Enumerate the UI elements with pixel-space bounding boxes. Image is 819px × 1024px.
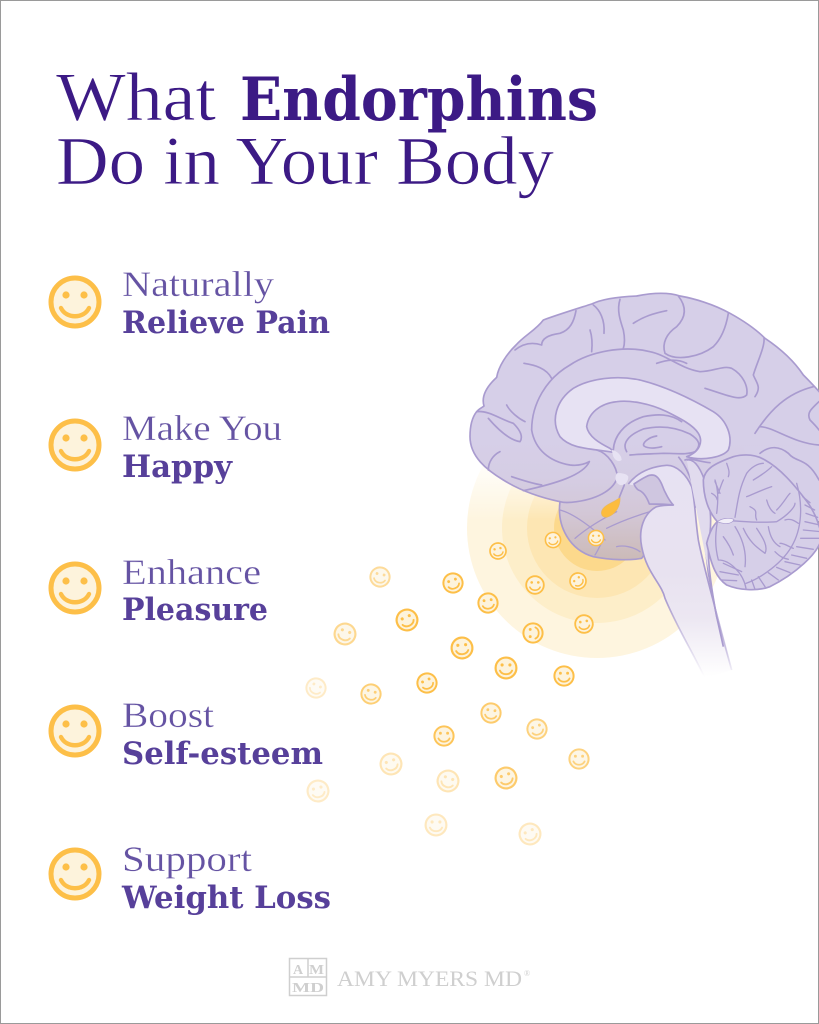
benefit: Boost Self-esteem: Self-esteem — [122, 736, 323, 772]
benefit: Naturally Relieve Pain: Relieve Pain — [122, 305, 330, 341]
title: Endorphins — [240, 65, 598, 135]
benefit: Support Weight Loss: Support — [122, 839, 252, 879]
benefit: Naturally Relieve Pain — [51, 264, 330, 341]
benefit: Make You Happy — [51, 408, 282, 485]
benefit: Support Weight Loss — [51, 839, 331, 916]
benefit: Enhance Pleasure — [51, 552, 268, 628]
title: What — [56, 59, 216, 135]
optic chiasm gap — [612, 450, 628, 485]
brain illustration — [460, 293, 819, 678]
logo mark: M — [309, 963, 324, 978]
benefit: Boost Self-esteem: Boost — [122, 695, 214, 735]
logo mark: MD — [292, 981, 324, 996]
logo mark: A — [293, 963, 304, 978]
yellow radiating rings — [460, 395, 740, 658]
cerebrum — [470, 293, 819, 560]
benefit: Support Weight Loss: Weight Loss — [121, 880, 331, 916]
benefit: Enhance Pleasure: Enhance — [122, 552, 261, 592]
title — [56, 59, 598, 199]
cerebellum — [703, 455, 819, 590]
pituitary — [601, 497, 620, 517]
right lobe base colour — [743, 447, 819, 523]
corpus callosum — [555, 378, 730, 459]
cerebellar junction highlight — [717, 518, 734, 524]
benefit: Make You Happy: Happy — [122, 449, 233, 485]
benefit: Naturally Relieve Pain: Naturally — [122, 264, 274, 304]
cerebellum folds — [712, 463, 819, 589]
logo mark — [290, 958, 326, 996]
thalamus arches — [613, 415, 682, 450]
footer logo: ® — [524, 969, 530, 978]
brand name: AMY MYERS MD — [337, 966, 522, 991]
cerebral folds — [477, 296, 819, 502]
benefit: Make You Happy: Make You — [122, 408, 282, 448]
band behind stem — [678, 457, 732, 670]
benefit: Enhance Pleasure: Pleasure — [122, 592, 268, 628]
hypothalamus folds — [560, 510, 650, 555]
midbrain tectum — [634, 475, 673, 505]
title: Do in Your Body — [56, 123, 555, 199]
footer logo — [290, 958, 530, 996]
benefit: Boost Self-esteem — [51, 695, 323, 772]
released endorphin smileys — [303, 530, 604, 848]
fourth-ventricle swoosh — [685, 459, 710, 463]
brainstem — [628, 465, 732, 678]
